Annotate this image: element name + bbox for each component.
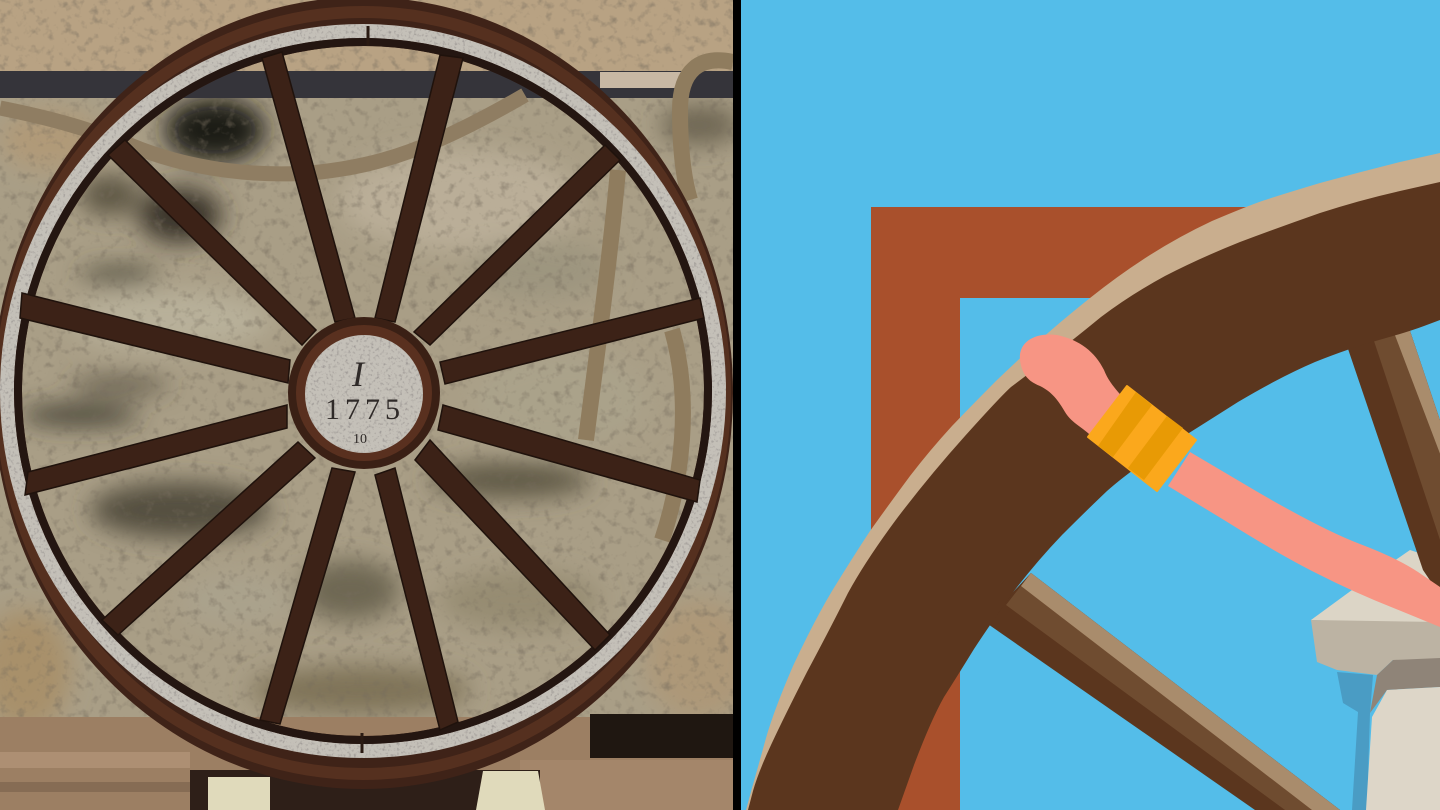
stone column bbox=[1311, 550, 1440, 810]
column capital top bbox=[1311, 550, 1430, 622]
lower spoke bbox=[985, 573, 1340, 810]
silver iron ring bbox=[7, 31, 719, 751]
panel: photograph of antique wheel bbox=[0, 0, 755, 810]
hub bbox=[288, 317, 440, 469]
column capital front bbox=[1311, 620, 1440, 675]
wheel rim tan edge bbox=[746, 153, 1440, 810]
divider bbox=[733, 0, 741, 810]
stone support blocks bbox=[208, 771, 545, 810]
inner dark ring edge bbox=[18, 42, 708, 740]
stone wall background bbox=[0, 0, 733, 717]
wheel rim bbox=[0, 0, 733, 789]
hand knob bbox=[1020, 334, 1125, 440]
column shaft bbox=[1366, 687, 1440, 810]
arm stroke to column bbox=[1168, 452, 1440, 627]
iron beam on wall bbox=[0, 71, 733, 98]
rim joints bbox=[362, 26, 368, 753]
upper right spoke bbox=[1348, 330, 1440, 587]
hub number: 10 bbox=[353, 432, 367, 447]
hub date: 1775 bbox=[325, 393, 405, 426]
arm bbox=[1020, 334, 1440, 627]
hub inscription: I bbox=[351, 354, 366, 394]
column shadow bbox=[1337, 672, 1373, 810]
rim highlights bbox=[1, 12, 725, 774]
brown brick frame bbox=[871, 207, 1246, 810]
spokes bbox=[20, 52, 704, 730]
wooden floor bbox=[0, 714, 733, 810]
capital shadow bbox=[1370, 658, 1440, 713]
vertical ropes at right bbox=[586, 60, 733, 540]
wheel bbox=[0, 0, 733, 789]
blue sky background bbox=[741, 0, 1440, 810]
orange hair band bbox=[1088, 386, 1196, 491]
panel: cartoon illustration of wheel bbox=[741, 0, 1440, 810]
hanging rope bbox=[0, 95, 525, 174]
wheel rim brown bbox=[748, 182, 1440, 810]
